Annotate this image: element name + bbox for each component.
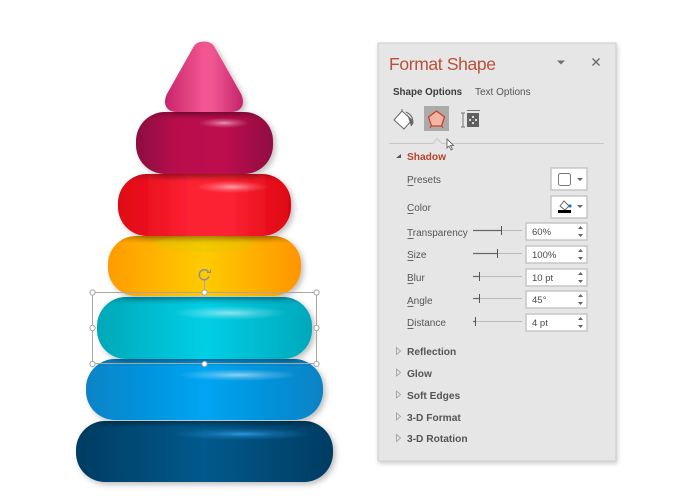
collapsed sections: Soft Edges bbox=[407, 391, 461, 402]
pink cone bbox=[165, 42, 243, 112]
icon: effects pentagon (selected) bbox=[424, 106, 449, 131]
row: Blur bbox=[407, 269, 587, 286]
collapsed sections bbox=[396, 347, 468, 445]
tabs: Shape Options bbox=[393, 87, 463, 98]
row: Transparency: Transparency bbox=[407, 228, 468, 239]
icon: fill bucket bbox=[394, 109, 413, 129]
row: Angle: 45° bbox=[532, 295, 547, 306]
section heading: Shadow: Shadow bbox=[407, 152, 446, 163]
panel: Format Shape bbox=[378, 43, 616, 461]
row: Size bbox=[407, 246, 587, 263]
row: Transparency: 60% bbox=[532, 227, 552, 238]
row: Distance bbox=[407, 314, 587, 331]
navy ring bbox=[76, 421, 333, 482]
teal ring bbox=[97, 297, 312, 359]
collapsed sections: 3-D Rotation bbox=[407, 434, 468, 445]
row: Blur: 10 pt bbox=[532, 273, 553, 284]
tab divider bbox=[389, 138, 604, 144]
selection handles around teal ring bbox=[90, 270, 319, 367]
row: Transparency bbox=[407, 223, 587, 240]
row: Size: Size bbox=[407, 250, 427, 261]
pyramid toy stack bbox=[76, 42, 333, 482]
yellow ring bbox=[108, 236, 301, 296]
tabs bbox=[393, 87, 531, 98]
row: Angle bbox=[407, 291, 587, 308]
row: Color bbox=[407, 196, 587, 218]
row: Blur: Blur bbox=[407, 273, 425, 284]
row: Distance: Distance bbox=[407, 318, 446, 329]
red ring bbox=[118, 174, 291, 236]
row: Presets bbox=[407, 168, 587, 190]
row: Distance: 4 pt bbox=[532, 318, 548, 329]
collapsed sections: Glow bbox=[407, 369, 432, 380]
row: Angle: Angle bbox=[407, 296, 433, 307]
panel menu and close controls bbox=[557, 58, 600, 66]
heading: Format Shape: Format Shape bbox=[389, 54, 496, 74]
row: Color: Color bbox=[407, 203, 432, 214]
collapsed sections: 3-D Format bbox=[407, 413, 461, 424]
magenta ring bbox=[136, 112, 273, 174]
tabs: Text Options bbox=[475, 87, 531, 98]
icon: size and properties bbox=[461, 110, 480, 127]
cursor bbox=[447, 139, 454, 150]
blue ring bbox=[86, 359, 323, 420]
row: Presets: Presets bbox=[407, 175, 441, 186]
row: Size: 100% bbox=[532, 250, 557, 261]
collapsed sections: Reflection bbox=[407, 347, 456, 358]
